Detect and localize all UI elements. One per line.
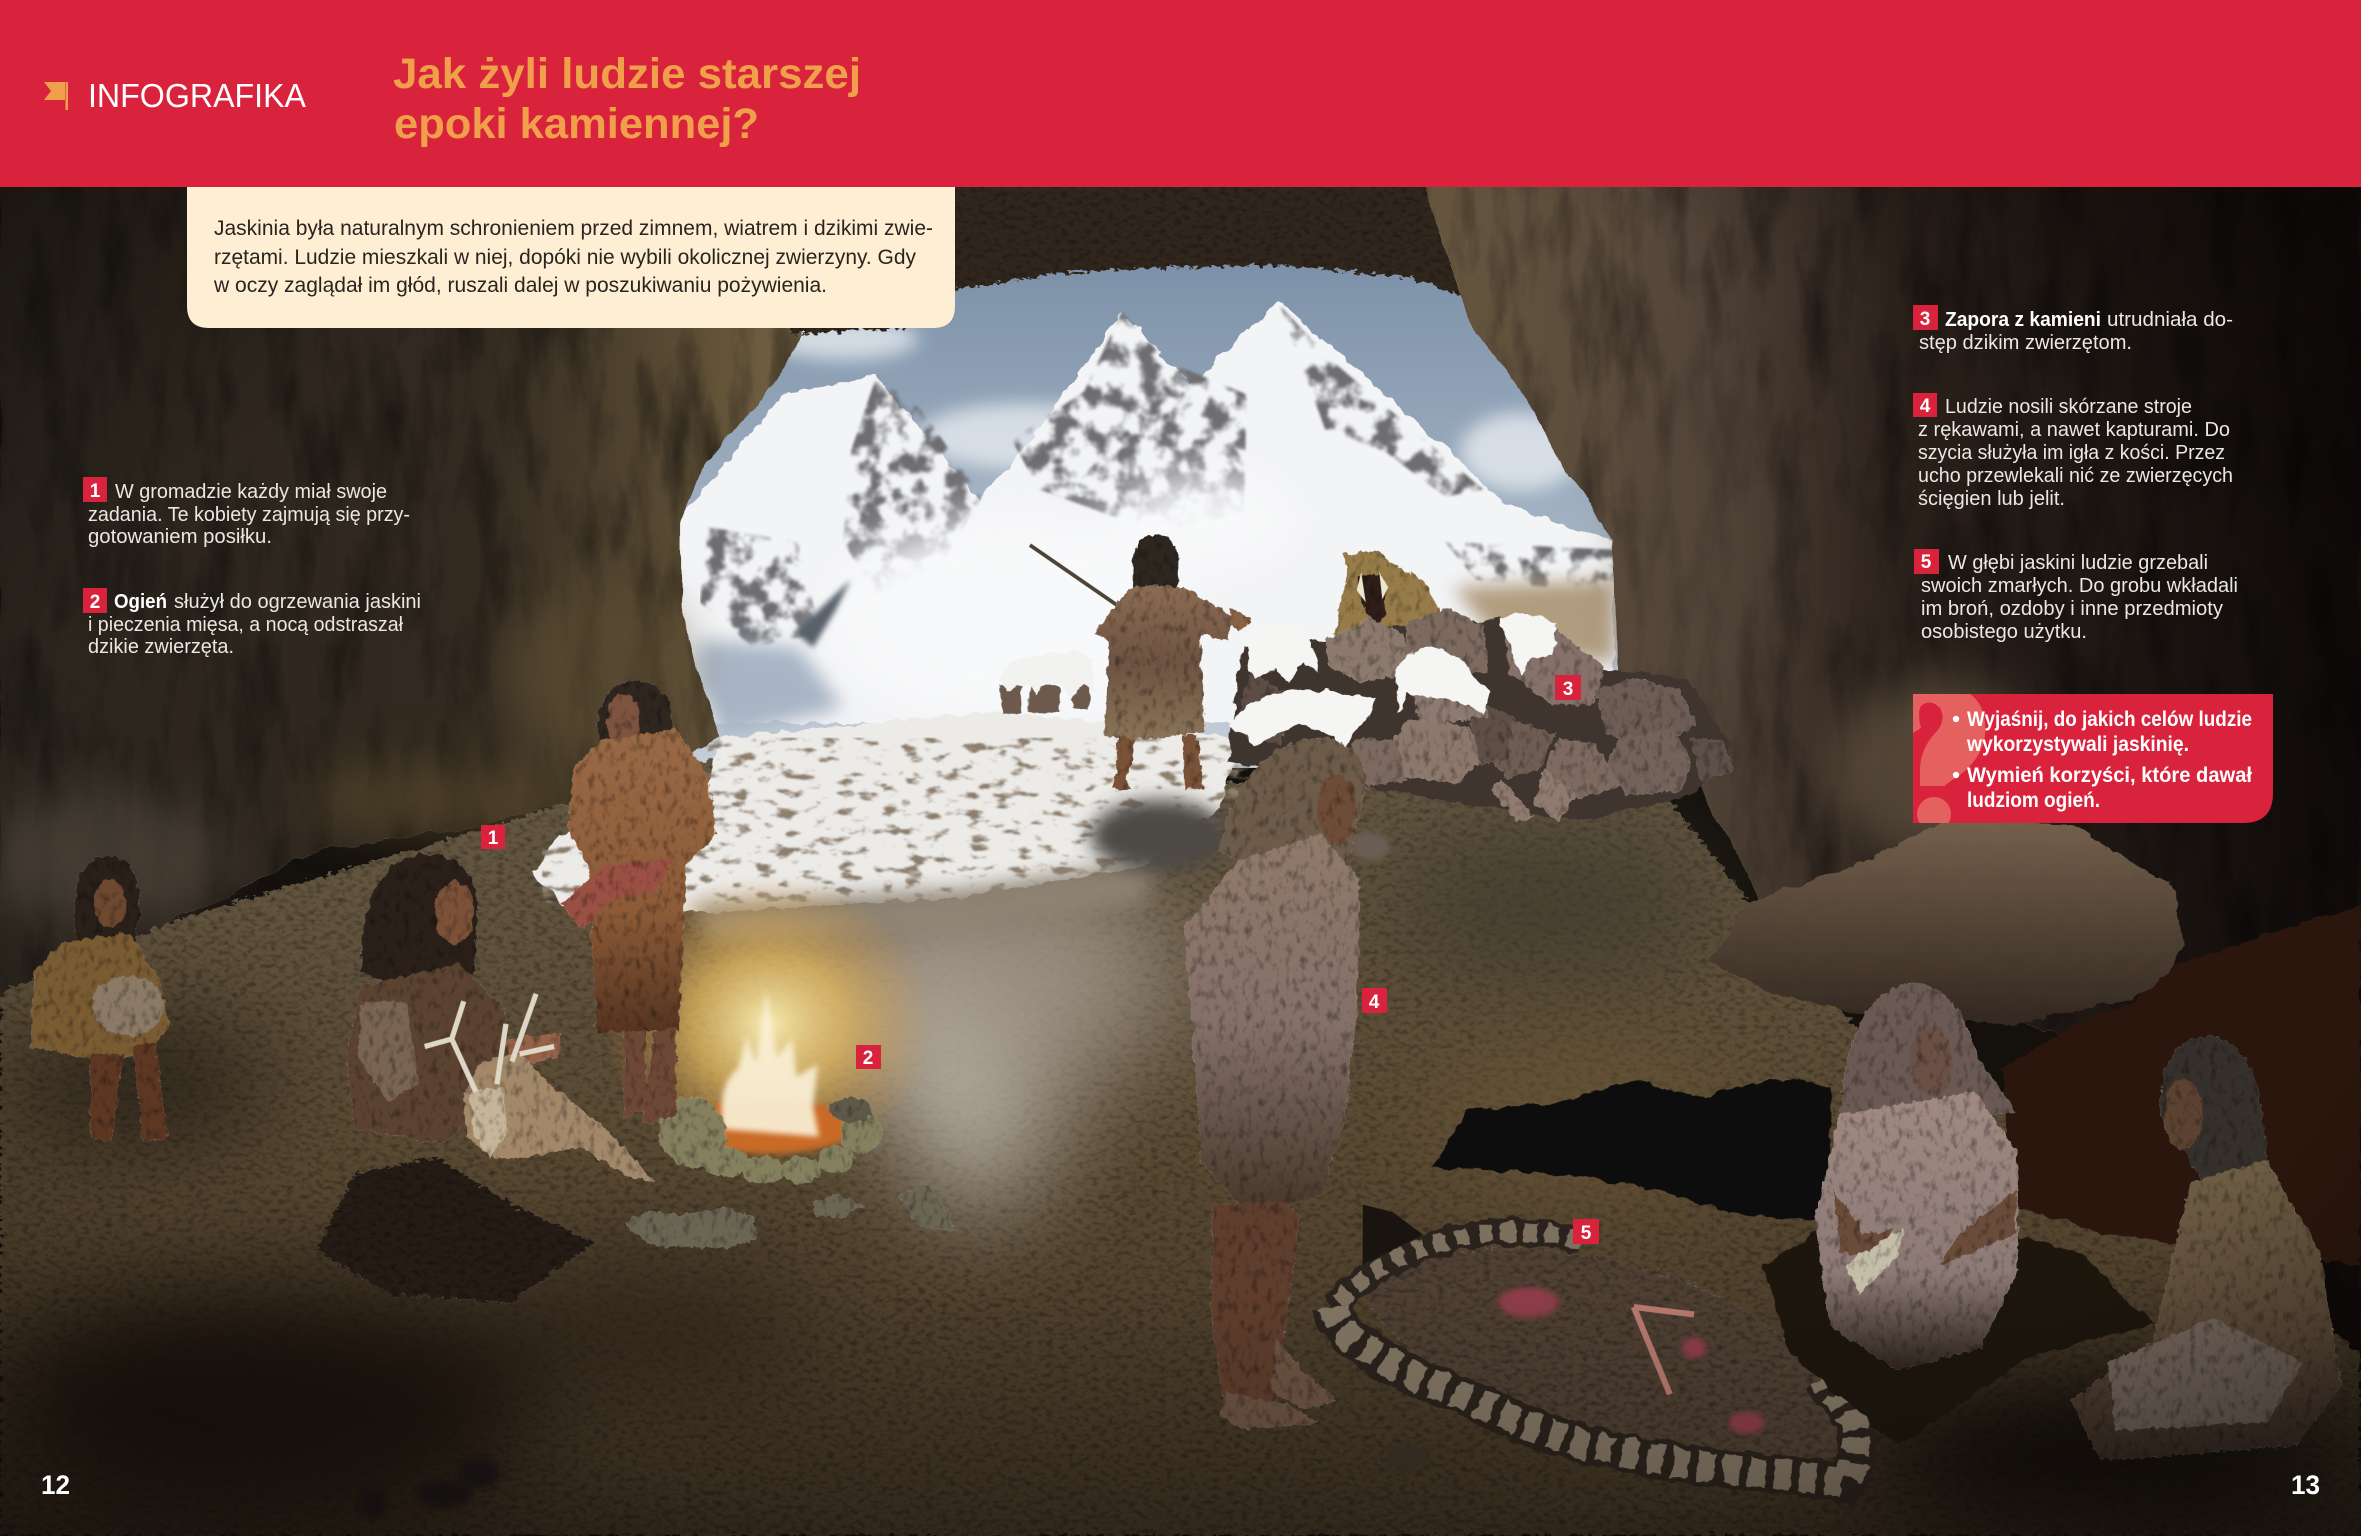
note 3: utrudniała do- bbox=[2107, 309, 2233, 331]
note 3: stęp dzikim zwierzętom. bbox=[1919, 332, 2132, 354]
saber-toothed cat bbox=[1333, 551, 1446, 663]
note 4 bbox=[1913, 393, 2233, 510]
marker 4 bbox=[1362, 988, 1387, 1013]
title bbox=[393, 50, 861, 148]
page number right: 13 bbox=[2291, 1470, 2320, 1500]
note 4: z rękawami, a nawet kapturami. Do bbox=[1918, 419, 2230, 441]
haze from fire and smoke bbox=[858, 979, 1046, 1212]
marker 2 bbox=[856, 1045, 881, 1069]
note 4: ucho przewlekali nić ze zwierzęcych bbox=[1918, 465, 2233, 487]
intro text panel bbox=[187, 187, 955, 328]
note 5: 5 bbox=[1921, 552, 1932, 573]
question panel: Wymień korzyści, które dawał bbox=[1967, 764, 2252, 787]
figure: seated woman bbox=[346, 854, 562, 1144]
right rock ledge bbox=[1709, 813, 2183, 1024]
rock barrier with snow bbox=[1227, 608, 1735, 822]
note 1: 1 bbox=[90, 481, 101, 502]
figure: kneeling man bbox=[1814, 983, 2018, 1370]
note 2: i pieczenia mięsa, a nocą odstraszał bbox=[88, 614, 404, 636]
note 3: 3 bbox=[1920, 309, 1930, 330]
page number left: 12 bbox=[41, 1470, 70, 1500]
icon: question mark bbox=[1913, 694, 1985, 831]
saber-tooth fangs bbox=[1357, 572, 1388, 602]
question panel: Wyjaśnij, do jakich celów ludzie bbox=[1967, 708, 2252, 731]
note 1: W gromadzie każdy miał swoje bbox=[115, 481, 387, 503]
note 1: gotowaniem posiłku. bbox=[88, 526, 272, 548]
spear bbox=[1030, 545, 1117, 605]
mottled exposed rock on peaks bbox=[700, 306, 1614, 647]
figure: standing woman with bird bbox=[560, 681, 717, 1123]
note 4: 4 bbox=[1920, 396, 1931, 417]
header band bbox=[0, 0, 2361, 187]
note 5: W głębi jaskini ludzie grzebali bbox=[1948, 552, 2208, 574]
section label: INFOGRAFIKA bbox=[88, 77, 306, 114]
note 1: zadania. Te kobiety zajmują się przy- bbox=[88, 504, 410, 526]
note 5 bbox=[1914, 549, 2238, 643]
note 5: osobistego użytku. bbox=[1921, 621, 2087, 643]
sky and snowy mountains seen through the cave mouth bbox=[663, 256, 1641, 768]
bottom shading bbox=[0, 1295, 2361, 1536]
marker 4: 4 bbox=[1369, 992, 1380, 1013]
note 5: im broń, ozdoby i inne przedmioty bbox=[1921, 598, 2223, 620]
marker 5: 5 bbox=[1581, 1223, 1592, 1244]
question panel bbox=[1913, 694, 2273, 831]
marker 1: 1 bbox=[488, 828, 499, 849]
cave ceiling arch bbox=[783, 181, 1521, 334]
marker 1 bbox=[481, 825, 505, 849]
note 4: ścięgien lub jelit. bbox=[1918, 488, 2065, 510]
marker 2: 2 bbox=[863, 1048, 873, 1069]
deer antlers bbox=[425, 994, 554, 1092]
note 4: szycia służyła im igła z kości. Przez bbox=[1918, 442, 2225, 464]
marker 5 bbox=[1573, 1219, 1599, 1244]
intro text panel: w oczy zaglądał im głód, ruszali dalej w poszukiwaniu pożywienia. bbox=[213, 274, 827, 297]
figure: woman with child at far left bbox=[30, 855, 170, 1141]
marker 3: 3 bbox=[1563, 679, 1573, 700]
note 4: Ludzie nosili skórzane stroje bbox=[1945, 396, 2192, 418]
grave stone oval with burial bbox=[1333, 1205, 1867, 1483]
intro text panel: rzętami. Ludzie mieszkali w niej, dopóki nie wybili okolicznej zwierzyny. Gdy bbox=[214, 246, 916, 269]
note 2: służył do ogrzewania jaskini bbox=[174, 591, 421, 613]
floor pebbles bbox=[360, 831, 1429, 1518]
question panel: wykorzystywali jaskinię. bbox=[1966, 733, 2189, 756]
dark mound in front of seated woman bbox=[316, 1156, 595, 1302]
grave: dark rock behind bbox=[1430, 1078, 1834, 1223]
deer lying on the ground bbox=[464, 1054, 655, 1182]
note 2: dzikie zwierzęta. bbox=[88, 636, 234, 658]
note 2: 2 bbox=[90, 592, 100, 613]
note 2: Ogień bbox=[114, 591, 167, 613]
note 1 bbox=[83, 477, 410, 548]
fire glow bbox=[602, 873, 934, 1174]
question panel: ludziom ogień. bbox=[1967, 789, 2100, 812]
dark red rock column bbox=[2003, 903, 2361, 1265]
icon: ribbon flag bbox=[44, 82, 68, 110]
loose stones by the hearth bbox=[625, 1184, 956, 1248]
snow at the cave entrance bbox=[533, 711, 1250, 941]
note 5: swoich zmarłych. Do grobu wkładali bbox=[1921, 575, 2238, 597]
note 3 bbox=[1913, 305, 2233, 354]
intro text panel: Jaskinia była naturalnym schronieniem przed zimnem, wiatrem i dzikimi zwie- bbox=[214, 217, 933, 240]
snow-capped wall stones behind the hunter bbox=[1000, 651, 1096, 712]
hearth with stone ring and flames bbox=[646, 991, 882, 1184]
left cave wall bbox=[0, 181, 801, 1009]
note 3: Zapora z kamieni bbox=[1945, 309, 2101, 331]
note 2 bbox=[83, 588, 421, 658]
cave floor bbox=[0, 760, 2361, 1536]
dark rock at kneeling man bbox=[1762, 1205, 2153, 1446]
title: epoki kamiennej? bbox=[394, 100, 759, 148]
right cave wall bbox=[1423, 181, 2361, 1536]
figure: seated man at right bbox=[2070, 1036, 2341, 1461]
title: Jak żyli ludzie starszej bbox=[393, 50, 861, 98]
figure: large man with fur coat bbox=[1185, 738, 1365, 1429]
marker 3 bbox=[1555, 675, 1581, 700]
shadow on snow bbox=[1090, 800, 1229, 872]
figure: hunter seen from behind bbox=[1095, 535, 1253, 789]
